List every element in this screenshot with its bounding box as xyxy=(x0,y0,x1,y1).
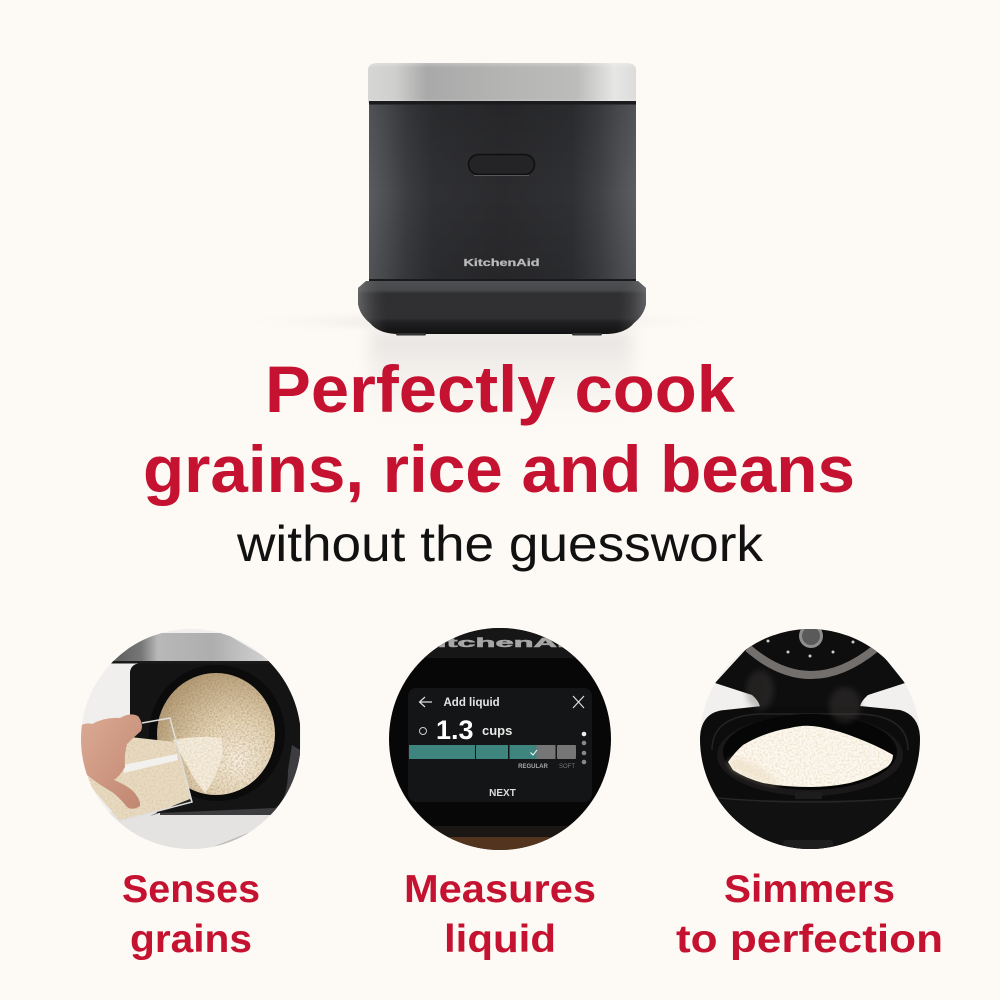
label: Simmers to perfection: Simmers xyxy=(724,868,895,911)
product: rice cooker xyxy=(225,63,735,435)
photo: cooker display: SOFT xyxy=(559,764,575,770)
heading: Perfectly cook xyxy=(265,352,735,426)
label: Senses grains: grains xyxy=(130,918,252,961)
label: Measures liquid: liquid xyxy=(444,918,556,961)
steam vent xyxy=(799,629,823,648)
photo: cooker display: cups xyxy=(482,723,512,738)
photo: cooker display xyxy=(389,628,611,850)
infographic canvas xyxy=(81,63,940,960)
photo: pouring rice into cooker xyxy=(81,629,301,849)
back arrow xyxy=(420,697,432,707)
panel: simmers to perfection xyxy=(700,629,920,849)
label: Simmers to perfection xyxy=(676,868,943,961)
photo: cooker display: 1.3 xyxy=(436,715,474,745)
heading xyxy=(143,352,855,506)
photo: cooker display: NEXT xyxy=(489,788,516,799)
heading: grains, rice and beans xyxy=(143,432,855,506)
label: Measures liquid xyxy=(404,868,596,961)
panel: measures liquid xyxy=(389,628,611,850)
button on cooker xyxy=(468,154,534,176)
drop icon xyxy=(420,728,426,734)
liquid level bar xyxy=(409,745,576,759)
photo: cooked rice in open cooker xyxy=(700,629,920,849)
label: Senses grains xyxy=(122,868,260,961)
page dots xyxy=(582,732,586,764)
close icon xyxy=(573,696,584,708)
label: Measures liquid: Measures xyxy=(404,868,596,911)
KitchenAid logo: KitchenAid xyxy=(464,257,540,269)
label: Simmers to perfection: to perfection xyxy=(676,918,943,961)
label: Senses grains: Senses xyxy=(122,868,260,911)
subheading: without the guesswork xyxy=(236,516,764,572)
photo: cooker display: Add liquid xyxy=(444,697,500,709)
panel: senses grains xyxy=(81,629,301,849)
photo: cooker display: REGULAR xyxy=(518,764,548,770)
photo: cooker display: KitchenAid xyxy=(414,636,586,650)
